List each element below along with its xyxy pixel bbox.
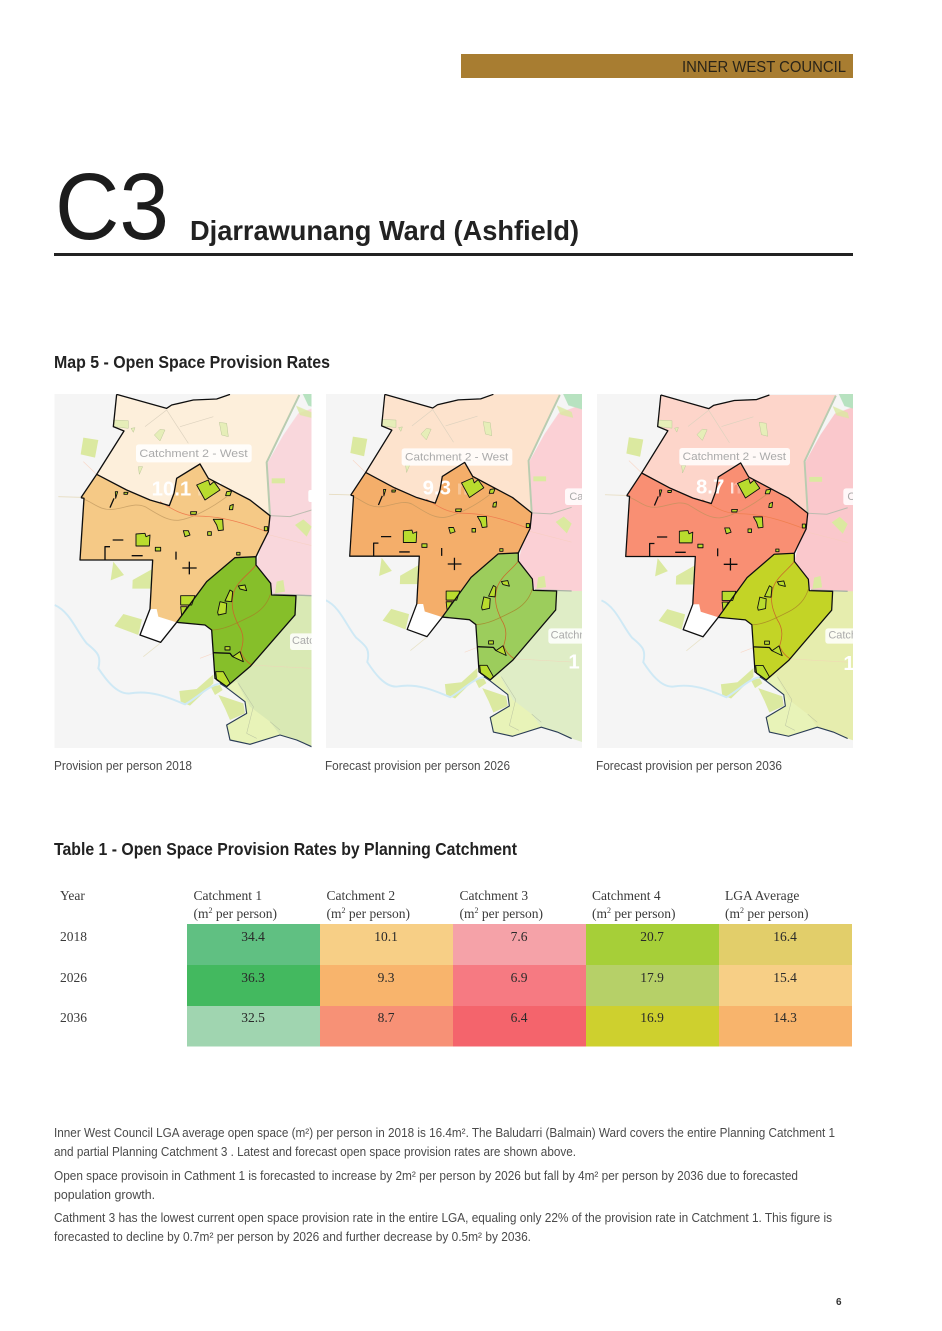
table row 2036: 16.9	[640, 1010, 664, 1025]
table row 2036: 14.3	[773, 1010, 797, 1025]
table row 2018: 16.4	[773, 929, 797, 944]
table row 2036: 32.5	[241, 1010, 265, 1025]
map: forecast provision 2026	[326, 394, 582, 748]
map: forecast provision 2036: Catchment 2 - West	[683, 451, 786, 463]
table header row: Catchment 1	[194, 888, 262, 903]
text block: commentary: population growth.	[54, 1188, 155, 1202]
table header row: (m	[460, 906, 474, 921]
title: section code: C3	[55, 154, 169, 260]
table row 2026: 2026	[60, 970, 87, 985]
map: forecast provision 2026: Catchment	[551, 630, 604, 642]
table row 2036	[60, 1006, 852, 1046]
table row 2026: 9.3	[378, 970, 395, 985]
map: forecast provision 2036: 1	[843, 653, 855, 675]
table header row: 2	[607, 906, 611, 915]
header bar	[461, 54, 853, 78]
table row 2026: 15.4	[773, 970, 797, 985]
map: provision per person 2018: 10.1 m²	[152, 479, 222, 501]
caption: map 2018: Provision per person 2018	[54, 758, 192, 773]
map: forecast provision 2036	[597, 394, 853, 748]
table row 2018: 34.4	[241, 929, 265, 944]
map: forecast provision 2036: 8.7 m²	[696, 477, 755, 499]
table row 2036: 8.7	[378, 1010, 395, 1025]
table header row: Catchment 3	[460, 888, 528, 903]
table row 2018	[60, 924, 852, 965]
caption: map 2036: Forecast provision per person 2036	[596, 758, 782, 773]
map: forecast provision 2036: Catchment	[847, 491, 900, 503]
table header row: per person)	[346, 906, 410, 921]
text block: commentary: Cathment 3 has the lowest current open space provision rate in the entire LGA, equaling only 22% of the provision rate in Catchment 1. This figure is	[54, 1211, 832, 1225]
map: forecast provision 2026: Catchment 2 - West	[405, 451, 508, 463]
header bar: INNER WEST COUNCIL	[682, 59, 846, 76]
table header row: (m	[592, 906, 607, 921]
text block: commentary: forecasted to decline by 0.7m² per person by 2026 and further decrease by 0.5m² by 2036.	[54, 1230, 531, 1244]
table header row: 2	[208, 906, 212, 915]
table header row: 2	[740, 906, 744, 915]
table header row: Catchment 2	[326, 888, 395, 903]
table header row: 2	[342, 906, 346, 915]
caption: map 2026: Forecast provision per person 2026	[325, 758, 510, 773]
table header row: 2	[474, 906, 478, 915]
table: provision rates by catchment	[60, 888, 852, 1046]
table row 2018: 7.6	[511, 929, 528, 944]
text block: commentary: Open space provisoin in Cathment 1 is forecasted to increase by 2m² per person by 2026 but fall by 4m² per person by 2036 due to forecasted	[54, 1169, 798, 1183]
table row 2026: 36.3	[241, 970, 265, 985]
page number: 6	[836, 1297, 842, 1308]
map: provision per person 2018: Catchment 2 - West	[139, 448, 248, 460]
map: provision per person 2018: Catchment	[292, 635, 345, 647]
table header row: Catchment 4	[592, 888, 661, 903]
table row 2026: 6.9	[511, 970, 528, 985]
table header row: per person)	[478, 906, 543, 921]
table row 2018: 10.1	[374, 929, 398, 944]
heading: table: Table 1 - Open Space Provision Rates by Planning Catchment	[54, 839, 517, 859]
table header row: (m	[326, 906, 342, 921]
map: forecast provision 2026: 9.3 m²	[423, 477, 482, 499]
table row 2018: 2018	[60, 929, 87, 944]
table header row: Year	[60, 888, 85, 903]
map: forecast provision 2026: Catchment	[569, 491, 622, 503]
table header row: (m	[725, 906, 740, 921]
text block: commentary	[54, 1126, 835, 1244]
table header row: (m	[194, 906, 208, 921]
map: forecast provision 2026: 1	[568, 651, 580, 673]
title: ward name: Djarrawunang Ward (Ashfield)	[190, 215, 579, 246]
table header row: per person)	[212, 906, 277, 921]
text block: commentary: Inner West Council LGA average open space (m²) per person in 2018 is 16.4m². The Baludarri (Balmain) Ward covers the entire Planning Catchment 1	[54, 1126, 835, 1140]
table header row	[60, 888, 808, 921]
map: provision per person 2018	[54, 394, 312, 748]
table row 2036: 6.4	[511, 1010, 528, 1025]
table header row: per person)	[744, 906, 808, 921]
table row 2026: 17.9	[640, 970, 664, 985]
table row 2036: 2036	[60, 1010, 87, 1025]
table row 2018: 20.7	[640, 929, 664, 944]
text block: commentary: and partial Planning Catchment 3 . Latest and forecast open space provision rates are shown above.	[54, 1145, 576, 1159]
table header row: per person)	[611, 906, 675, 921]
table header row: LGA Average	[725, 888, 799, 903]
map: forecast provision 2036: Catchment	[828, 630, 881, 642]
table row 2026	[60, 965, 852, 1006]
heading: map section: Map 5 - Open Space Provision Rates	[54, 352, 330, 372]
